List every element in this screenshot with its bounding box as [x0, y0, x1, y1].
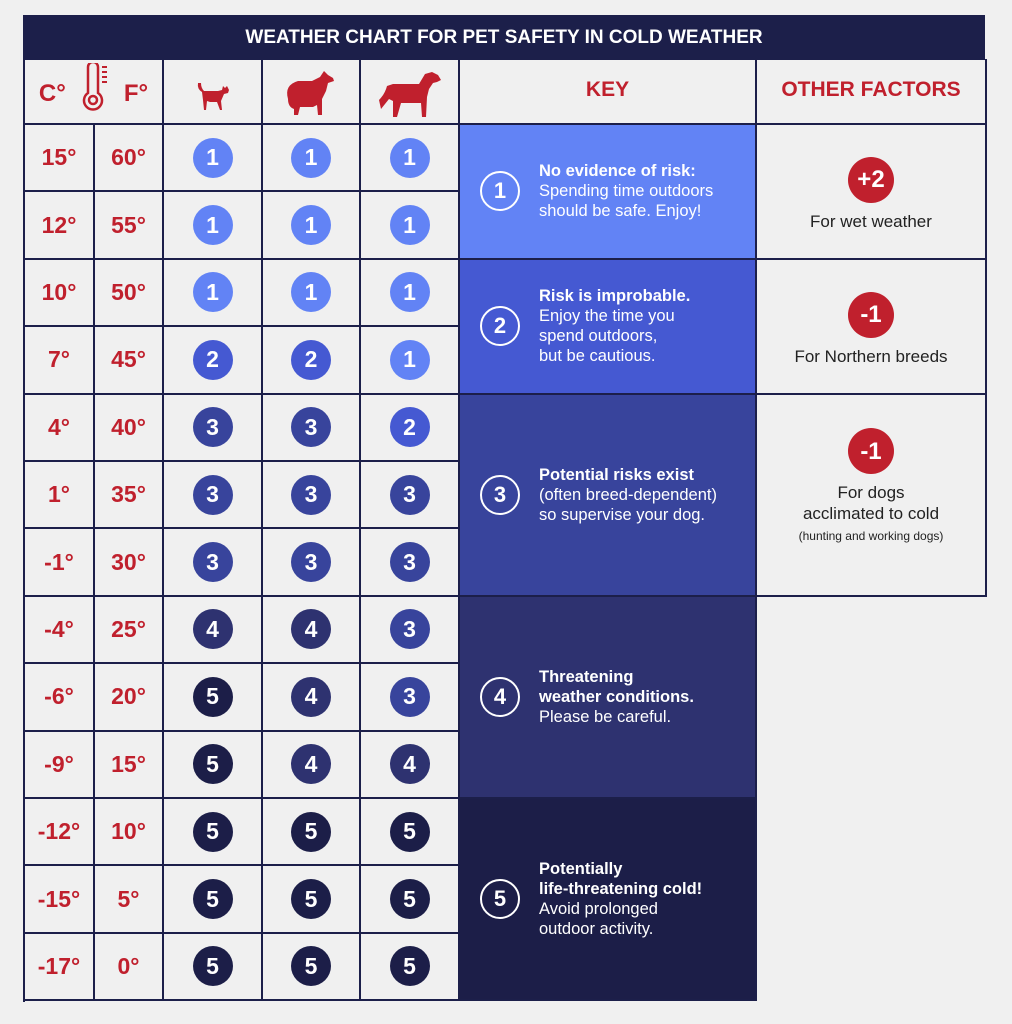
table grid: 5 [403, 818, 416, 844]
key 5: life-threatening cold! [539, 880, 702, 898]
table grid: 1 [403, 279, 416, 305]
key 3: so supervise your dog. [539, 506, 705, 524]
table grid: 3 [305, 549, 317, 575]
key 2: 2 [494, 313, 506, 338]
header: medium dog [263, 59, 361, 125]
table grid: 50° [111, 279, 146, 305]
table grid: -4° [44, 616, 74, 642]
table grid: 5 [206, 818, 219, 844]
table grid: 55° [111, 212, 146, 238]
table grid: 3 [305, 414, 317, 440]
table grid: 1 [206, 279, 219, 305]
table grid: 5 [206, 683, 219, 709]
table grid: 5° [118, 886, 140, 912]
table grid: 1° [48, 481, 70, 507]
key 5: 5 [494, 886, 506, 911]
other factor: acclimated dogs: -1 [860, 438, 882, 465]
table grid: 2 [403, 414, 416, 440]
other factor: wet weather: For wet weather [810, 212, 932, 231]
table grid: 4 [206, 616, 219, 642]
table grid: 0° [118, 953, 140, 979]
table grid: 3 [206, 549, 219, 575]
other factor: acclimated dogs: For dogs [837, 483, 905, 502]
table grid: 4° [48, 414, 70, 440]
key 1 [460, 125, 757, 260]
table grid: 20° [111, 683, 146, 709]
table grid: 4 [305, 683, 317, 709]
key 1: Spending time outdoors [539, 182, 713, 200]
header: key [460, 59, 757, 125]
key 5: Potentially [539, 860, 622, 878]
key 4: Threatening [539, 668, 633, 686]
table grid: 3 [403, 616, 416, 642]
key 3: (often breed-dependent) [539, 486, 717, 504]
other factor: acclimated dogs [757, 395, 987, 597]
key 2: spend outdoors, [539, 327, 657, 345]
other factor: northern breeds: -1 [860, 301, 882, 328]
table grid: 5 [403, 886, 416, 912]
table grid: -1° [44, 549, 74, 575]
table grid: 25° [111, 616, 146, 642]
table grid: 5 [305, 886, 317, 912]
table grid: 4 [305, 751, 317, 777]
table grid: 1 [206, 144, 219, 170]
other factor: northern breeds [757, 260, 987, 395]
key 2: Risk is improbable. [539, 287, 690, 305]
key 1: should be safe. Enjoy! [539, 202, 701, 220]
header: temperature: F° [124, 80, 148, 107]
other factor: wet weather: +2 [857, 166, 885, 193]
key 3: Potential risks exist [539, 466, 694, 484]
table grid: 5 [206, 953, 219, 979]
table grid: 5 [305, 818, 317, 844]
table grid: 45° [111, 346, 146, 372]
table grid: 1 [403, 212, 416, 238]
other factor: acclimated dogs: (hunting and working dogs) [799, 529, 943, 543]
table grid: 40° [111, 414, 146, 440]
table grid: 1 [305, 212, 317, 238]
table grid: 10° [111, 818, 146, 844]
title bar: WEATHER CHART FOR PET SAFETY IN COLD WEATHER [245, 26, 763, 48]
key 1: 1 [494, 178, 506, 203]
table grid: 4 [403, 751, 416, 777]
key 2: but be cautious. [539, 347, 656, 365]
icon: thermometer [82, 63, 107, 111]
key 5: Avoid prolonged [539, 900, 658, 918]
table grid: 4 [305, 616, 317, 642]
header: temperature: C° [39, 80, 66, 107]
table grid: 1 [403, 144, 416, 170]
table grid: 30° [111, 549, 146, 575]
header: other factors [757, 59, 987, 125]
table grid: -9° [44, 751, 74, 777]
other factor: wet weather [757, 125, 987, 260]
table grid: 1 [403, 346, 416, 372]
table grid: 5 [403, 953, 416, 979]
table grid: 5 [305, 953, 317, 979]
key 3: 3 [494, 482, 506, 507]
key 2 [460, 260, 757, 395]
key 4: 4 [494, 684, 506, 709]
key 3 [460, 395, 757, 597]
table grid: 5 [206, 886, 219, 912]
table grid: 3 [403, 683, 416, 709]
table grid: 35° [111, 481, 146, 507]
header: temperature [25, 59, 164, 125]
table grid: 3 [403, 549, 416, 575]
table grid: -12° [38, 818, 80, 844]
key 4: Please be careful. [539, 708, 671, 726]
key 1: No evidence of risk: [539, 162, 696, 180]
other factor: acclimated dogs: acclimated to cold [803, 504, 939, 523]
table grid: 2 [206, 346, 219, 372]
table grid: 3 [206, 414, 219, 440]
table grid: -15° [38, 886, 80, 912]
table grid: 15° [111, 751, 146, 777]
key 2: Enjoy the time you [539, 307, 675, 325]
rows [25, 125, 95, 192]
table grid: 3 [206, 481, 219, 507]
table grid: 5 [206, 751, 219, 777]
table grid: 1 [206, 212, 219, 238]
table grid: 1 [305, 144, 317, 170]
table grid: 3 [305, 481, 317, 507]
rows: 15° [42, 144, 76, 170]
header: key: KEY [586, 78, 629, 101]
table grid: 10° [42, 279, 76, 305]
table grid: 1 [305, 279, 317, 305]
table grid: 12° [42, 212, 76, 238]
table grid: -6° [44, 683, 74, 709]
table grid: 2 [305, 346, 317, 372]
table grid: 3 [403, 481, 416, 507]
key 4 [460, 597, 757, 799]
header: other factors: OTHER FACTORS [781, 78, 961, 101]
key 5: outdoor activity. [539, 920, 653, 938]
title bar [23, 15, 985, 60]
table grid: -17° [38, 953, 80, 979]
header: large dog [361, 59, 460, 125]
other factor: northern breeds: For Northern breeds [794, 347, 948, 366]
key 4: weather conditions. [539, 688, 694, 706]
table grid: 7° [48, 346, 70, 372]
table grid: 60° [111, 144, 146, 170]
key 5 [460, 799, 757, 1001]
header: small dog [164, 59, 263, 125]
